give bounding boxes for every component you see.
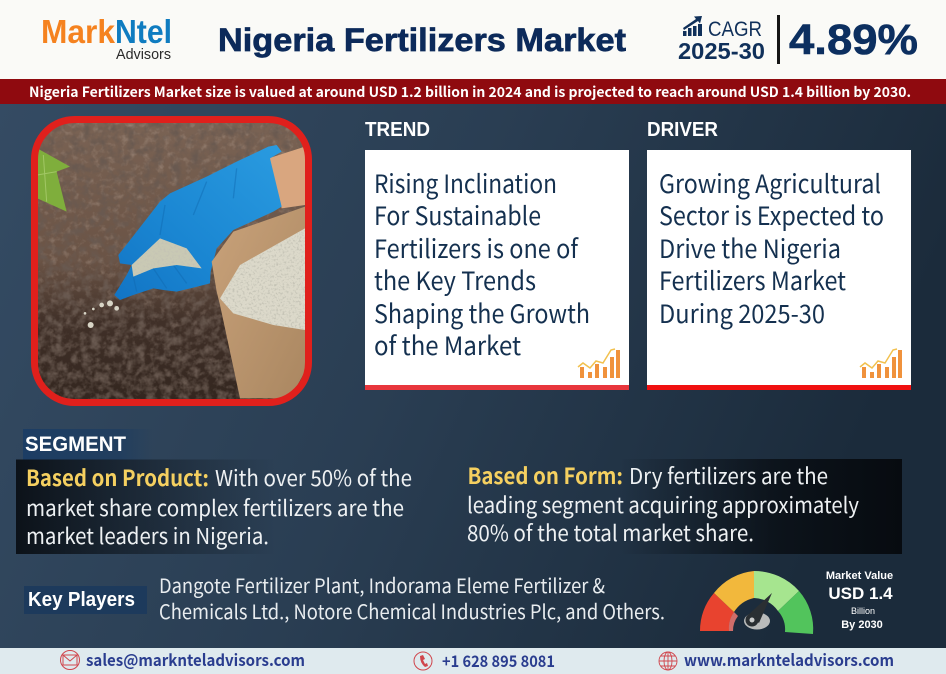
heading: trend: TREND	[365, 119, 430, 141]
heading: driver: DRIVER	[647, 119, 719, 141]
gauge: market value	[700, 571, 813, 634]
card: trend: Shaping the Growth	[374, 294, 590, 331]
segment: based on product: market leaders in Nigeria.	[26, 519, 269, 551]
segment: based on form	[467, 459, 902, 554]
logo: MarkNtel Advisors: Advisors	[116, 46, 171, 63]
card: trend: the Key Trends	[374, 261, 536, 298]
card: trend: of the Market	[374, 326, 521, 363]
market value text: By 2030	[841, 619, 883, 631]
market value text: USD 1.4	[828, 584, 893, 603]
segment: based on form: Based on Form:	[468, 459, 623, 491]
text: key players list: Dangote Fertilizer Plant, Indorama Eleme Fertilizer &	[159, 570, 605, 599]
segment: based on product	[16, 460, 412, 554]
logo: MarkNtel Advisors: Mark	[41, 13, 116, 50]
contact: phone: +1 628 895 8081	[442, 648, 555, 672]
segment: based on form: Dry fertilizers are the	[629, 459, 828, 491]
CAGR block: 2025-30	[678, 38, 765, 64]
photo: gloved hand spreading fertilizer on soil	[34, 120, 308, 402]
card: driver: Sector is Expected to	[659, 196, 884, 233]
segment: based on product: With over 50% of the	[215, 461, 412, 493]
card: driver: Fertilizers Market	[659, 261, 846, 298]
card: driver	[647, 150, 911, 390]
segment: based on form: 80% of the total market share.	[467, 516, 754, 548]
card: driver: During 2025-30	[659, 294, 825, 331]
text: key players list: Chemicals Ltd., Notore Chemical Industries Plc, and Others.	[159, 596, 665, 625]
market value text	[826, 570, 893, 631]
market value text: Billion	[851, 606, 875, 616]
summary banner: Nigeria Fertilizers Market size is valued at around USD 1.2 billion in 2024 and is projected to reach around USD 1.4 billion by 2030.	[29, 82, 911, 102]
card: trend: For Sustainable	[374, 196, 541, 233]
segment: based on product: market share complex fertilizers are the	[26, 491, 404, 523]
CAGR block: 4.89%	[789, 16, 918, 64]
segment: based on product: Based on Product:	[26, 461, 209, 493]
icon: trend chart	[578, 349, 620, 378]
card: trend: Fertilizers is one of	[374, 229, 580, 266]
segment: based on form: leading segment acquiring approximately	[467, 488, 859, 520]
card: driver: Drive the Nigeria	[659, 229, 841, 266]
icon: driver chart	[860, 349, 902, 378]
label: key players: Key Players	[28, 589, 135, 611]
header band	[0, 0, 946, 80]
logo: MarkNtel Advisors	[41, 13, 172, 63]
market value text: Market Value	[826, 570, 893, 582]
panel: trend	[365, 119, 629, 390]
key players	[24, 570, 665, 625]
logo: MarkNtel Advisors: Ntel	[115, 13, 172, 50]
icon: growth bars	[683, 16, 702, 36]
heading: segment: SEGMENT	[25, 433, 126, 456]
contact: website: www.marknteladvisors.com	[684, 647, 894, 671]
card: trend	[365, 150, 629, 390]
contact: email: sales@marknteladvisors.com	[86, 647, 305, 671]
title: Nigeria Fertilizers Market	[218, 22, 626, 58]
card: driver: Growing Agricultural	[659, 164, 881, 201]
panel: driver	[647, 119, 911, 390]
card: trend: Rising Inclination	[374, 164, 557, 201]
CAGR block: CAGR	[708, 18, 762, 41]
CAGR block	[678, 15, 918, 64]
heading: segment	[23, 429, 153, 460]
footer contact bar	[0, 647, 946, 674]
text: key players list	[159, 570, 665, 625]
